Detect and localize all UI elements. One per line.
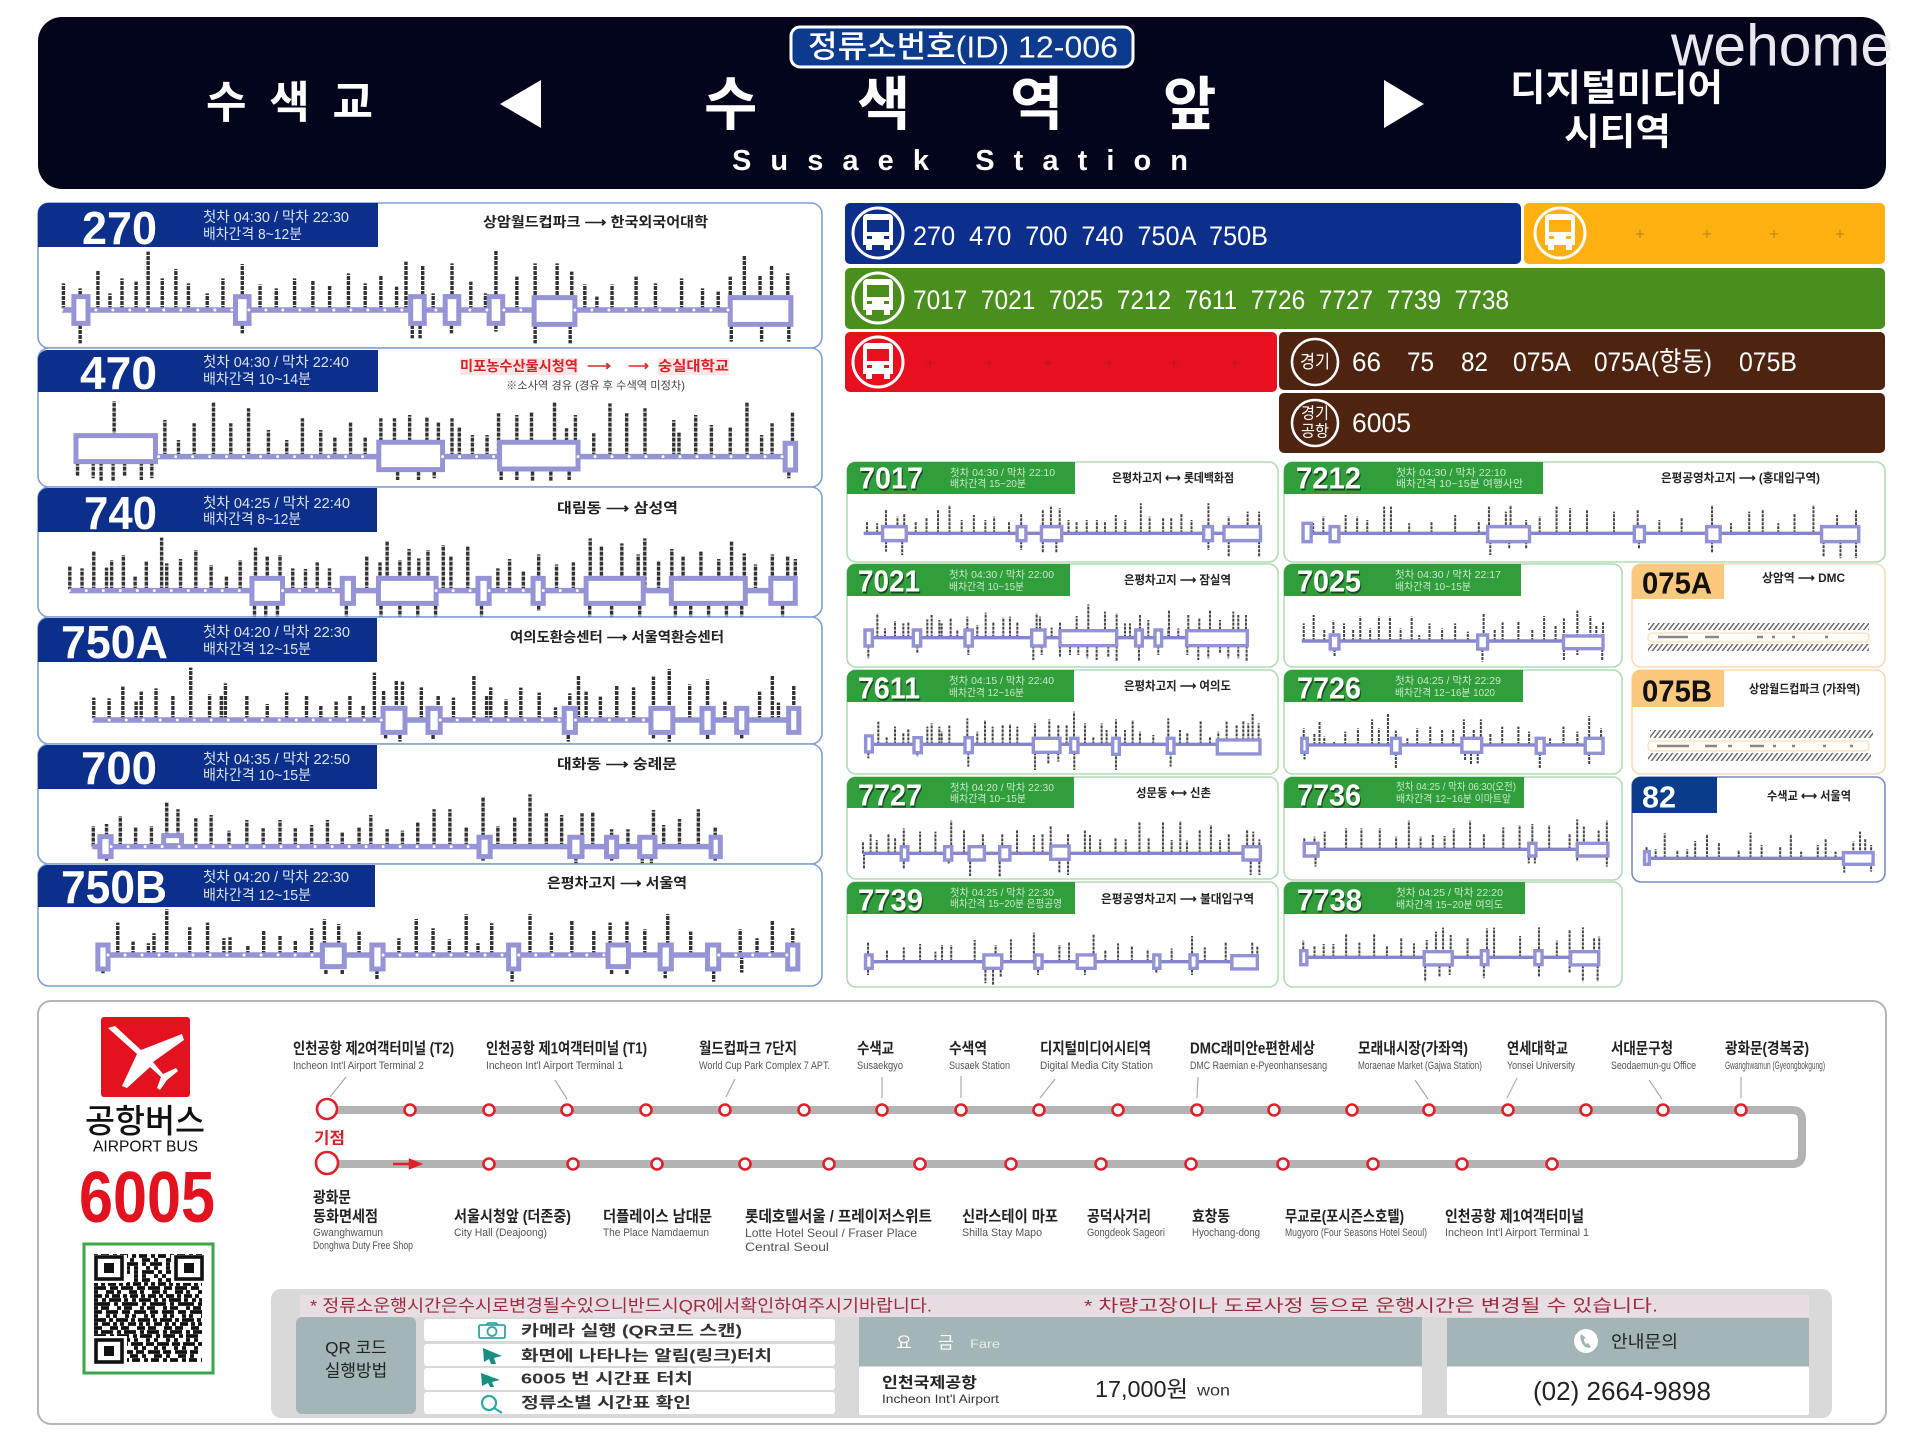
leader lines	[330, 1076, 1741, 1099]
route card 7611	[847, 670, 1278, 774]
route diagram 82	[1645, 832, 1873, 873]
upper stop labels: Incheon Int'l Airport Terminal 1	[486, 1060, 623, 1072]
fare panel: 17,000원	[1095, 1376, 1188, 1402]
QR code	[84, 1244, 213, 1373]
lower stop labels: 신라스테이 마포	[962, 1208, 1058, 1226]
upper stop labels: 모래내시장(가좌역)	[1358, 1040, 1468, 1058]
panel: airport bus 6005	[38, 1001, 1886, 1424]
route card 470: 배차간격 10~14분	[203, 371, 311, 388]
route card 7739: 7739	[858, 882, 923, 918]
lower stop labels: Hyochang-dong	[1192, 1227, 1260, 1239]
route card 075A	[1632, 564, 1885, 667]
route card 750A	[38, 616, 822, 744]
route card 750A: 첫차 04:20 / 막차 22:30	[203, 624, 350, 641]
lower stop labels: Mugyoro (Four Seasons Hotel Seoul)	[1285, 1227, 1427, 1239]
red destination label: 미포농수산물시청역	[460, 358, 578, 374]
route card 750A: 여의도환승센터 ⟶ 서울역환승센터	[510, 629, 724, 645]
route diagram 7212	[1303, 505, 1859, 558]
red bar: +	[1043, 354, 1053, 372]
route diagram 7025	[1302, 611, 1604, 662]
upper stop labels: World Cup Park Complex 7 APT.	[699, 1060, 830, 1072]
upper stop labels: 월드컵파크 7단지	[699, 1040, 797, 1058]
start label: 기점	[314, 1130, 345, 1148]
route card 7017: 7017	[859, 460, 923, 496]
next stop name: 디지털미디어	[1510, 68, 1723, 108]
route card 740: 740	[84, 487, 157, 539]
red bar: +	[1230, 354, 1240, 372]
lower stop labels: Incheon Int'l Airport Terminal 1	[1445, 1227, 1589, 1239]
upper stop labels: 인천공항 제1여객터미널 (T1)	[486, 1040, 647, 1058]
upper stop labels: Seodaemun-gu Office	[1611, 1060, 1696, 1072]
brown bar: Gyeonggi: 75	[1407, 347, 1434, 377]
route card 7025: 7025	[1297, 564, 1361, 598]
lower stop labels: 공덕사거리	[1087, 1208, 1151, 1226]
lower stop labels: City Hall (Deajoong)	[454, 1227, 547, 1239]
icon: camera	[479, 1323, 505, 1338]
route card 7017: 첫차 04:30 / 막차 22:10	[950, 467, 1055, 479]
route card 750B: 첫차 04:20 / 막차 22:30	[203, 869, 349, 886]
route card 075B	[1632, 670, 1885, 774]
icon: cursor	[481, 1373, 500, 1387]
warning: road conditions: * 차량고장이나 도로사정 등으로 운행시간은 변경될 수 있습니다.	[1084, 1296, 1658, 1316]
fare panel: won	[1196, 1382, 1230, 1400]
lower stop labels: 효창동	[1192, 1208, 1230, 1226]
lower stop labels: Gongdeok Sageori	[1087, 1227, 1165, 1239]
QR instruction steps	[424, 1319, 835, 1414]
route card 7726: 배차간격 12~16분 1020	[1395, 686, 1495, 699]
English stop name: Susaek Station	[732, 145, 1188, 177]
lower stop labels: 더플레이스 남대문	[603, 1208, 712, 1226]
lower stop labels: 광화문	[313, 1188, 351, 1206]
fare panel: 요	[896, 1334, 912, 1352]
route card 270: 상암월드컵파크 ⟶ 한국외국어대학	[483, 214, 708, 230]
brown bar: Gyeonggi airport	[1279, 393, 1885, 453]
route card 740: 대림동 ⟶ 삼성역	[557, 500, 678, 516]
orange bar: +	[1835, 224, 1845, 244]
route card 7021: 배차간격 10~15분	[949, 580, 1024, 593]
route card 270: 첫차 04:30 / 막차 22:30	[203, 209, 349, 226]
previous stop name: 수 색 교	[206, 78, 373, 128]
route card 7017	[847, 460, 1278, 562]
brown bar: Gyeonggi airport: 경기	[1301, 404, 1329, 422]
orange bar: +	[1635, 224, 1645, 244]
direction arrow	[393, 1160, 420, 1168]
route diagram 750B	[98, 909, 798, 982]
stop ID badge: 정류소번호(ID) 12-006	[808, 30, 1118, 64]
airport bus english title: AIRPORT BUS	[93, 1138, 198, 1156]
route card 7736: 배차간격 12~16분 이마트앞	[1396, 792, 1511, 805]
upper stop labels	[293, 1040, 1825, 1072]
route card 270: 270	[82, 202, 157, 254]
route card 7726: 첫차 04:25 / 막차 22:29	[1395, 675, 1501, 687]
current stop name: 수색역앞	[704, 72, 1216, 138]
next stop name: 시티역	[1564, 112, 1671, 152]
route diagram 7726	[1302, 713, 1603, 768]
route card 7021	[847, 564, 1278, 667]
brown bar: Gyeonggi: 경기	[1300, 352, 1330, 372]
brown bar: Gyeonggi: 075A	[1513, 347, 1571, 377]
route card 270: 배차간격 8~12분	[203, 226, 302, 243]
route diagram 750A	[92, 668, 799, 742]
red bar	[845, 332, 1277, 392]
route number 6005: 6005	[79, 1158, 215, 1238]
lower stop labels: Lotte Hotel Seoul / Fraser Place	[745, 1226, 917, 1240]
route card 82: 82	[1642, 780, 1676, 814]
QR instruction steps: 정류소별 시간표 확인	[521, 1394, 691, 1412]
route card 700	[38, 742, 822, 864]
brown bar: Gyeonggi airport: 6005	[1352, 408, 1411, 438]
contact panel	[1447, 1318, 1809, 1415]
route card 075B: 075B	[1642, 674, 1712, 708]
brown bar: Gyeonggi: 82	[1461, 347, 1488, 377]
route card 7025: 배차간격 10~15분	[1395, 580, 1471, 593]
lower stop labels: 서울시청앞 (더존중)	[454, 1208, 571, 1226]
route card 750A: 750A	[61, 616, 168, 668]
right arrow	[1384, 80, 1424, 128]
route card 7727: 배차간격 10~15분	[950, 792, 1026, 805]
route card 7727: 첫차 04:20 / 막차 22:30	[950, 782, 1054, 794]
route card 470	[38, 347, 822, 487]
route card 7212: 7212	[1296, 460, 1361, 496]
route diagram 7021	[865, 604, 1247, 662]
route card 7739: 첫차 04:25 / 막차 22:30	[950, 887, 1054, 899]
route diagram 7739	[866, 933, 1258, 985]
route card 7021: 첫차 04:30 / 막차 22:00	[949, 569, 1054, 581]
fare panel: 인천국제공항	[882, 1374, 977, 1392]
QR instructions label: 실행방법	[325, 1362, 387, 1380]
route card 7736: 7736	[1297, 778, 1361, 812]
route card 7021: 7021	[858, 564, 920, 598]
route card 7212: 배차간격 10~15분 여행사안	[1396, 477, 1523, 490]
brown bar: Gyeonggi: 66	[1352, 347, 1381, 377]
route card 075A: 상암역 ⟶ DMC	[1762, 571, 1845, 585]
route card 7212	[1284, 460, 1885, 562]
icon: phone	[1574, 1329, 1598, 1353]
next stop name	[1510, 68, 1723, 152]
icon: search	[482, 1396, 502, 1413]
contact panel: (02) 2664-9898	[1533, 1376, 1711, 1406]
upper stop labels: Yonsei University	[1507, 1060, 1575, 1072]
lower stop labels: Central Seoul	[745, 1240, 829, 1254]
orange bar: +	[1769, 224, 1779, 244]
route card 7212: 은평공영차고지 ⟶ (홍대입구역)	[1661, 470, 1820, 485]
lower stop labels	[313, 1188, 1589, 1254]
route card 075A: 075A	[1642, 566, 1712, 600]
icon: airplane logo	[101, 1017, 190, 1097]
upper stop labels: Incheon Int'l Airport Terminal 2	[293, 1060, 424, 1072]
red destination label: 숭실대학교	[658, 358, 729, 374]
red destination label: ⟶	[587, 358, 612, 374]
route card 7726	[1284, 670, 1622, 774]
lower stop labels: Donghwa Duty Free Shop	[313, 1240, 413, 1252]
route card 7739	[847, 882, 1278, 987]
fare panel	[859, 1317, 1422, 1415]
route card 7738	[1284, 882, 1622, 987]
fare panel: 금	[938, 1334, 954, 1352]
upper stop labels: Susaek Station	[949, 1060, 1010, 1072]
route card 700: 대화동 ⟶ 숭례문	[557, 756, 677, 772]
QR instruction steps: 카메라 실행 (QR코드 스캔)	[521, 1322, 742, 1340]
route card 7727	[847, 777, 1278, 879]
brown bar: Gyeonggi: 075A(향동)	[1594, 347, 1712, 377]
route note: ※소사역 경유 (경유 후 수색역 미정차)	[506, 379, 685, 392]
upper stop labels: Gwanghwamun (Gyeongbokgung)	[1725, 1060, 1825, 1072]
route card 470: 첫차 04:30 / 막차 22:40	[203, 354, 349, 371]
red destination label	[460, 358, 729, 375]
icon: cursor	[483, 1348, 502, 1364]
route card 700: 첫차 04:35 / 막차 22:50	[203, 751, 350, 768]
route card 740: 첫차 04:25 / 막차 22:40	[203, 495, 350, 512]
panel: notices and info	[271, 1289, 1832, 1418]
upper stop labels: Moraenae Market (Gajwa Station)	[1358, 1060, 1482, 1072]
upper stop labels: DMC래미안e편한세상	[1190, 1040, 1315, 1058]
brown bar: Gyeonggi airport: 공항	[1301, 422, 1329, 440]
route card 740	[38, 487, 822, 617]
route card 470: 470	[80, 347, 157, 399]
upper stop labels: 서대문구청	[1611, 1040, 1673, 1058]
QR instructions label: QR 코드	[325, 1338, 387, 1358]
route card 7738: 첫차 04:25 / 막차 22:20	[1396, 887, 1503, 899]
route diagram 740	[69, 538, 795, 617]
route diagram 075B	[1648, 730, 1873, 761]
red bar: +	[1169, 354, 1179, 372]
header banner	[38, 14, 1893, 189]
route stops	[316, 1099, 1746, 1174]
route diagram 700	[92, 794, 720, 863]
upper stop labels: 디지털미디어시티역	[1040, 1040, 1151, 1058]
QR instruction steps: 6005 번 시간표 터치	[521, 1370, 693, 1388]
route card 700: 배차간격 10~15분	[203, 767, 311, 784]
route diagram 075A	[1648, 623, 1869, 651]
lower stop labels: Shilla Stay Mapo	[962, 1227, 1042, 1239]
lower stop labels: 롯데호텔서울 / 프레이저스위트	[745, 1208, 932, 1226]
route card 7017: 배차간격 15~20분	[950, 477, 1026, 490]
route card 7738: 7738	[1297, 882, 1362, 918]
route card 7212: 첫차 04:30 / 막차 22:10	[1396, 467, 1506, 479]
route card 270	[38, 202, 822, 348]
QR instruction steps: 화면에 나타나는 알림(링크)터치	[521, 1348, 772, 1364]
route diagram 7017	[864, 503, 1260, 557]
route card 7739: 은평공영차고지 ⟶ 불대입구역	[1101, 892, 1254, 906]
route diagram 270	[62, 250, 791, 343]
route card 7736	[1284, 777, 1622, 880]
fare panel: Fare	[970, 1337, 1000, 1351]
route card 750B	[38, 861, 822, 986]
route card 7025	[1284, 564, 1622, 667]
upper stop labels: DMC Raemian e-Pyeonhansesang	[1190, 1060, 1327, 1072]
route card 700: 700	[81, 742, 157, 794]
brown bar: Gyeonggi	[1279, 332, 1885, 390]
route card 750A: 배차간격 12~15분	[203, 641, 311, 658]
red bar: +	[984, 354, 994, 372]
blue bar: 270 470 700 740 750A 750B	[913, 221, 1268, 251]
route card 7021: 은평차고지 ⟶ 잠실역	[1124, 573, 1231, 587]
upper stop labels: 수색역	[949, 1040, 987, 1058]
route diagram 7738	[1301, 927, 1600, 982]
upper stop labels: Susaekgyo	[857, 1060, 903, 1072]
airport bus title: 공항버스	[85, 1102, 205, 1140]
route card 82: 수색교 ⟷ 서울역	[1767, 789, 1851, 803]
warning: schedule change: * 정류소운행시간은수시로변경될수있으니반드시QR에서확인하여주시기바랍니다.	[310, 1296, 932, 1316]
green bar	[845, 268, 1885, 329]
orange bar: +	[1702, 224, 1712, 244]
left arrow	[500, 80, 541, 128]
contact panel: 안내문의	[1611, 1332, 1678, 1352]
QR instructions label	[296, 1317, 416, 1414]
watermark: wehome	[1670, 14, 1893, 78]
lower stop labels: 동화면세점	[313, 1208, 378, 1226]
lower stop labels: 무교로(포시즌스호텔)	[1285, 1208, 1404, 1226]
upper stop labels: 수색교	[857, 1040, 894, 1058]
route card 7738: 배차간격 15~20분 여의도	[1396, 898, 1503, 911]
route card 7611: 배차간격 12~16분	[949, 686, 1024, 699]
red bar: +	[925, 354, 935, 372]
route card 7727: 성문동 ⟷ 신촌	[1136, 786, 1211, 800]
panel: route bars	[845, 203, 1885, 453]
upper stop labels: 연세대학교	[1507, 1040, 1568, 1058]
upper stop labels: Digital Media City Station	[1040, 1060, 1153, 1072]
route card 750B: 은평차고지 ⟶ 서울역	[547, 875, 687, 891]
route diagram 470	[76, 401, 796, 482]
route card 075B: 상암월드컵파크 (가좌역)	[1749, 681, 1860, 696]
orange bar	[1524, 203, 1885, 264]
red destination label: ⟶	[628, 358, 649, 374]
route card 7739: 배차간격 15~20분 은평공영	[950, 897, 1062, 910]
route card 750B: 750B	[61, 861, 167, 913]
route card 7726: 7726	[1297, 670, 1361, 706]
route card 7736: 첫차 04:25 / 막차 06:30(오전)	[1396, 781, 1516, 793]
route diagram 7736	[1304, 819, 1608, 867]
fare panel: Incheon Int'l Airport	[882, 1392, 1000, 1406]
lower stop labels: The Place Namdaemun	[603, 1227, 709, 1239]
route line	[327, 1110, 1802, 1164]
red bar: +	[1104, 354, 1114, 372]
route card 7727: 7727	[858, 778, 922, 812]
lower stop labels: Gwanghwamun	[313, 1227, 383, 1239]
route card 740: 배차간격 8~12분	[203, 511, 301, 528]
route card 7025: 첫차 04:30 / 막차 22:17	[1395, 569, 1501, 581]
route card 7611: 은평차고지 ⟶ 여의도	[1124, 679, 1231, 693]
route card 7017: 은평차고지 ⟷ 롯데백화점	[1112, 470, 1234, 485]
brown bar: Gyeonggi: 075B	[1739, 347, 1797, 377]
route card 82	[1632, 777, 1885, 882]
green bar: 7017 7021 7025 7212 7611 7726 7727 7739 7738	[913, 285, 1509, 315]
route diagram 7727	[863, 821, 1261, 877]
route card 7611: 첫차 04:15 / 막차 22:40	[949, 675, 1054, 687]
route card 7611: 7611	[858, 670, 920, 706]
lower stop labels: 인천공항 제1여객터미널	[1445, 1208, 1584, 1226]
blue bar	[845, 203, 1521, 264]
route card 750B: 배차간격 12~15분	[203, 887, 311, 904]
upper stop labels: 광화문(경복궁)	[1725, 1040, 1809, 1058]
upper stop labels: 인천공항 제2여객터미널 (T2)	[293, 1040, 454, 1058]
route diagram 7611	[866, 712, 1260, 770]
